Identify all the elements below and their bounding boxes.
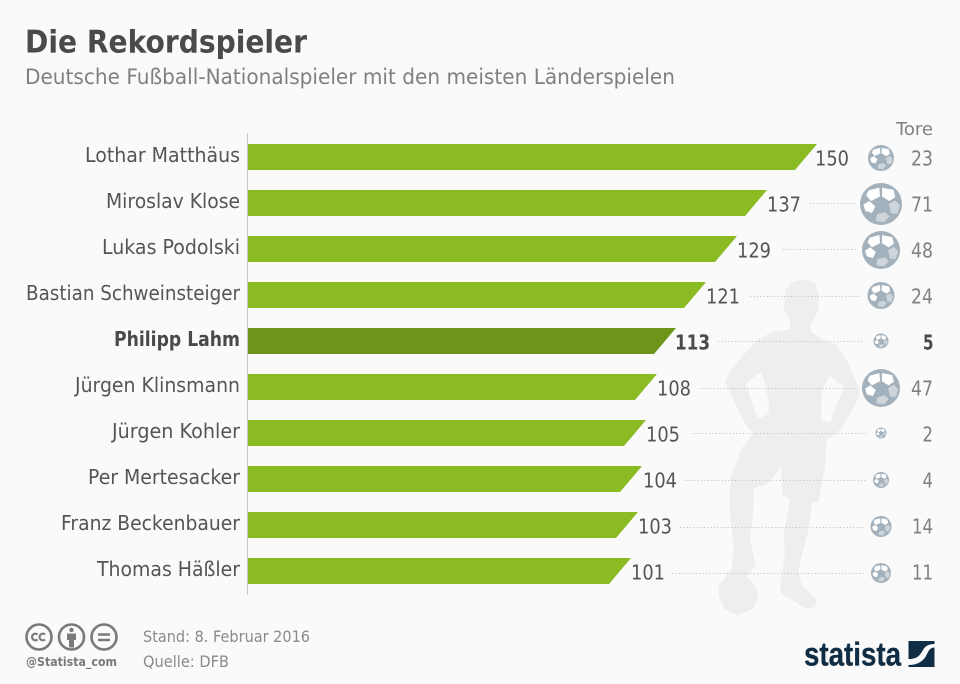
row: Lothar Matthäus [85,143,933,171]
row: Miroslav Klose: 137 [767,192,801,216]
row: Jürgen Klinsmann: Jürgen Klinsmann [73,373,240,397]
row: Franz Beckenbauer: 14 [912,514,933,538]
row: Miroslav Klose [106,183,933,225]
row: Lukas Podolski: 48 [911,238,933,262]
row: Philipp Lahm (highlighted): 113 [675,330,710,354]
row: Jürgen Kohler: 105 [646,422,680,446]
row: Lukas Podolski [102,231,933,269]
title: Die Rekordspieler [25,24,308,60]
source note: Quelle: DFB [143,652,229,671]
row: Jürgen Klinsmann [73,369,933,407]
row: Miroslav Klose: Miroslav Klose [106,189,240,213]
licence icons [26,624,116,650]
column heading: Tore: Tore [895,119,933,140]
row: Miroslav Klose: 71 [911,192,933,216]
row: Jürgen Klinsmann: 47 [911,376,933,400]
row: Jürgen Kohler: 2 [922,422,933,446]
row: Lothar Matthäus: 150 [815,146,849,170]
row: Bastian Schweinsteiger: Bastian Schweinsteiger [26,281,241,305]
social handle: @Statista_com [26,654,117,670]
row: Thomas Häßler [96,557,933,584]
date note: Stand: 8. Februar 2016 [143,627,310,646]
row: Jürgen Kohler: Jürgen Kohler [110,419,241,443]
row: Thomas Häßler: 101 [631,560,665,584]
row: Jürgen Klinsmann: 108 [657,376,691,400]
row: Lukas Podolski: Lukas Podolski [102,235,240,259]
row: Philipp Lahm (highlighted) [114,327,934,354]
row: Jürgen Kohler [110,419,933,446]
row: Franz Beckenbauer: 103 [638,514,672,538]
subtitle: Deutsche Fußball-Nationalspieler mit den meisten Länderspielen [25,65,675,90]
row: Lothar Matthäus: 23 [911,146,933,170]
row: Per Mertesacker: 4 [922,468,933,492]
statista logo: statista [804,636,902,672]
row: Philipp Lahm (highlighted): Philipp Lahm [114,327,240,351]
player silhouette [718,279,860,615]
row: Per Mertesacker: 104 [643,468,677,492]
row: Bastian Schweinsteiger: 24 [911,284,933,308]
row: Bastian Schweinsteiger: 121 [706,284,740,308]
row: Franz Beckenbauer [61,511,933,538]
row: Lukas Podolski: 129 [737,238,771,262]
row: Thomas Häßler: 11 [912,560,933,584]
row: Philipp Lahm (highlighted): 5 [923,330,934,354]
row: Thomas Häßler: Thomas Häßler [96,557,241,581]
row: Franz Beckenbauer: Franz Beckenbauer [61,511,241,535]
axis line [246,133,248,595]
row: Per Mertesacker [88,465,933,492]
dotted leader lines [672,204,867,574]
row: Lothar Matthäus: Lothar Matthäus [85,143,240,167]
row: Per Mertesacker: Per Mertesacker [88,465,241,489]
row: Bastian Schweinsteiger [26,281,933,309]
